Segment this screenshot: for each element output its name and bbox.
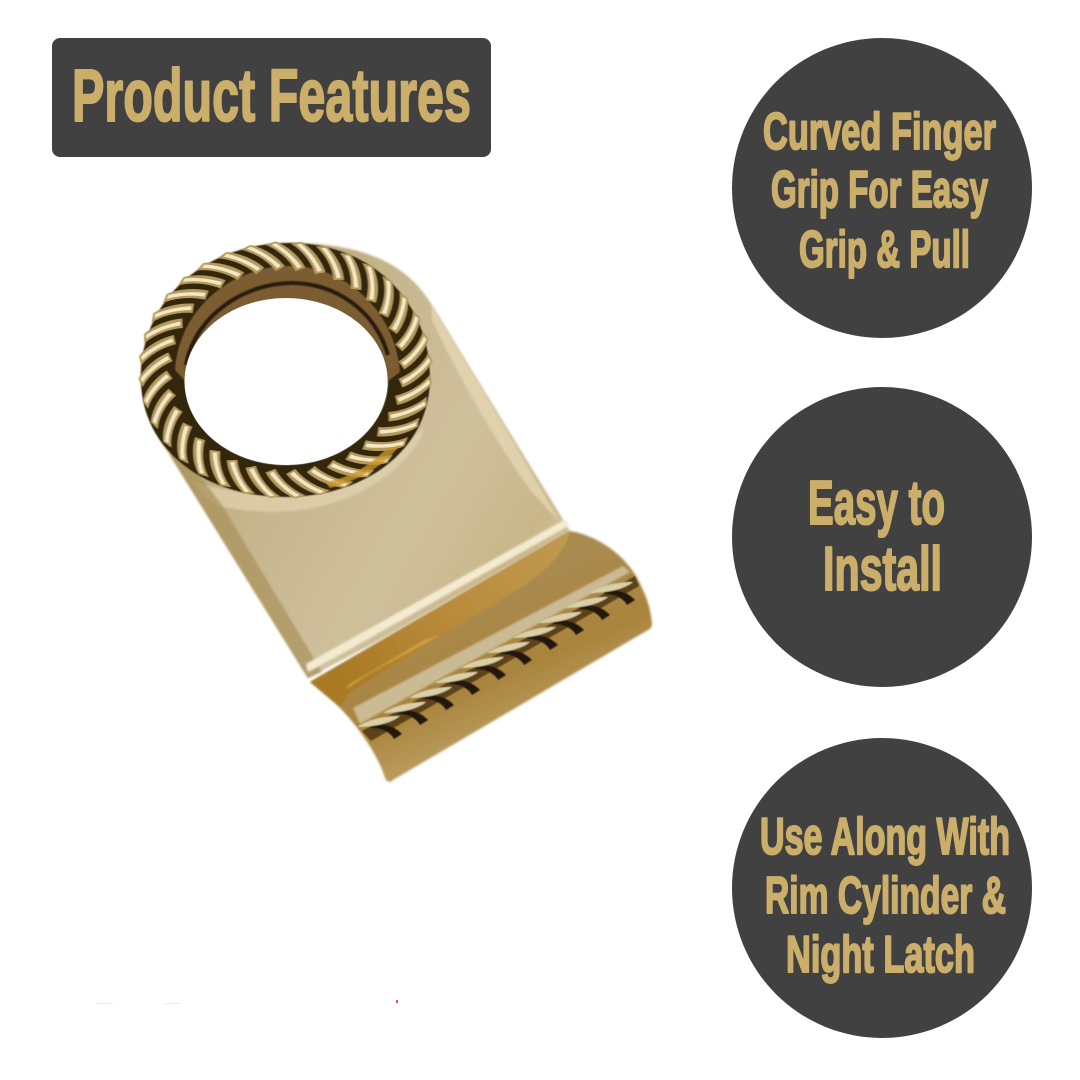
feature text (763, 103, 996, 279)
grip glints (345, 635, 440, 690)
recess wall (175, 266, 400, 381)
product photo: brass cylinder pull (137, 240, 652, 782)
grip pale band (353, 566, 630, 724)
feature badge: curved finger grip (732, 38, 1032, 338)
grip rope (357, 576, 639, 741)
feature text: Night Latch (786, 926, 975, 984)
feature text (760, 808, 1010, 984)
feature text (808, 469, 945, 604)
title: Product Features (72, 54, 471, 137)
feature text: Install (823, 535, 942, 604)
stray specks (97, 1000, 398, 1004)
finger grip lip (310, 531, 652, 782)
grip hollow (311, 531, 570, 706)
title banner (52, 38, 491, 157)
feature badge: use along with rim cylinder (732, 738, 1032, 1038)
inner recess shadow line (186, 283, 388, 365)
pull body plate (141, 243, 570, 678)
ring recess (141, 243, 430, 497)
rope ring (137, 240, 434, 500)
ring hole (184, 298, 388, 465)
plate highlights (170, 305, 570, 678)
feature text: Easy to (808, 469, 945, 538)
feature badge: easy to install (732, 387, 1032, 687)
ring gold glint (325, 445, 400, 488)
feature text: Grip & Pull (799, 221, 970, 279)
